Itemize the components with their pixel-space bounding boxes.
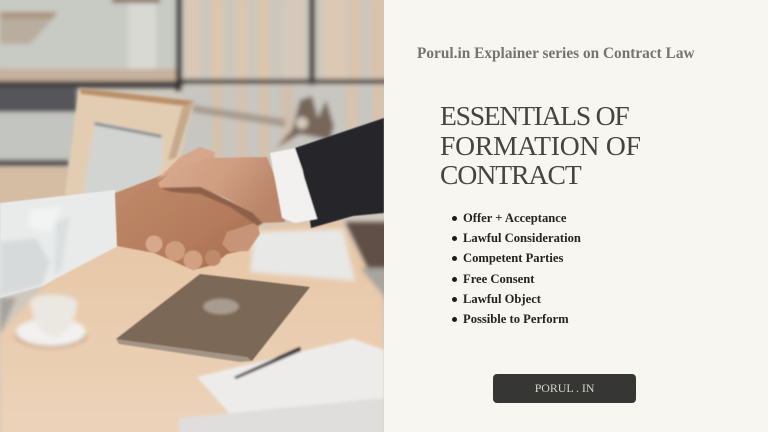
- left person hand with fingers: [115, 147, 260, 270]
- clasped hands: [115, 147, 285, 270]
- bullet list of essentials: Competent Parties: [463, 251, 563, 265]
- title: CONTRACT: [440, 159, 581, 190]
- title: ESSENTIALS OF: [440, 100, 628, 131]
- bullet list of essentials: Lawful Object: [463, 292, 541, 306]
- desk: [0, 219, 389, 432]
- document on desk: [250, 229, 355, 281]
- right arm white cuff and dark suit sleeve: [270, 118, 384, 228]
- button: Porul.in: [493, 374, 636, 403]
- blurred office background: [0, 0, 389, 207]
- bullet list of essentials: Offer + Acceptance: [463, 211, 566, 225]
- coffee cup and saucer: [15, 294, 87, 348]
- bullet list of essentials: Free Consent: [463, 272, 534, 286]
- photo: business handshake over a desk: [0, 0, 384, 432]
- bullet list of essentials: Lawful Consideration: [463, 231, 581, 245]
- left hand white shirt sleeve: [0, 190, 118, 298]
- tablet: [116, 274, 310, 362]
- series heading: Porul.in Explainer series on Contract Law: [417, 45, 695, 62]
- right person hand: [158, 157, 285, 223]
- picture frame: [65, 88, 194, 197]
- bullet list of essentials: [452, 211, 581, 326]
- papers and pen: [179, 339, 384, 432]
- bullet list of essentials: Possible to Perform: [463, 312, 569, 326]
- title: [440, 100, 641, 190]
- title: FORMATION OF: [440, 130, 641, 161]
- button: Porul.in: PORUL . IN: [535, 381, 594, 395]
